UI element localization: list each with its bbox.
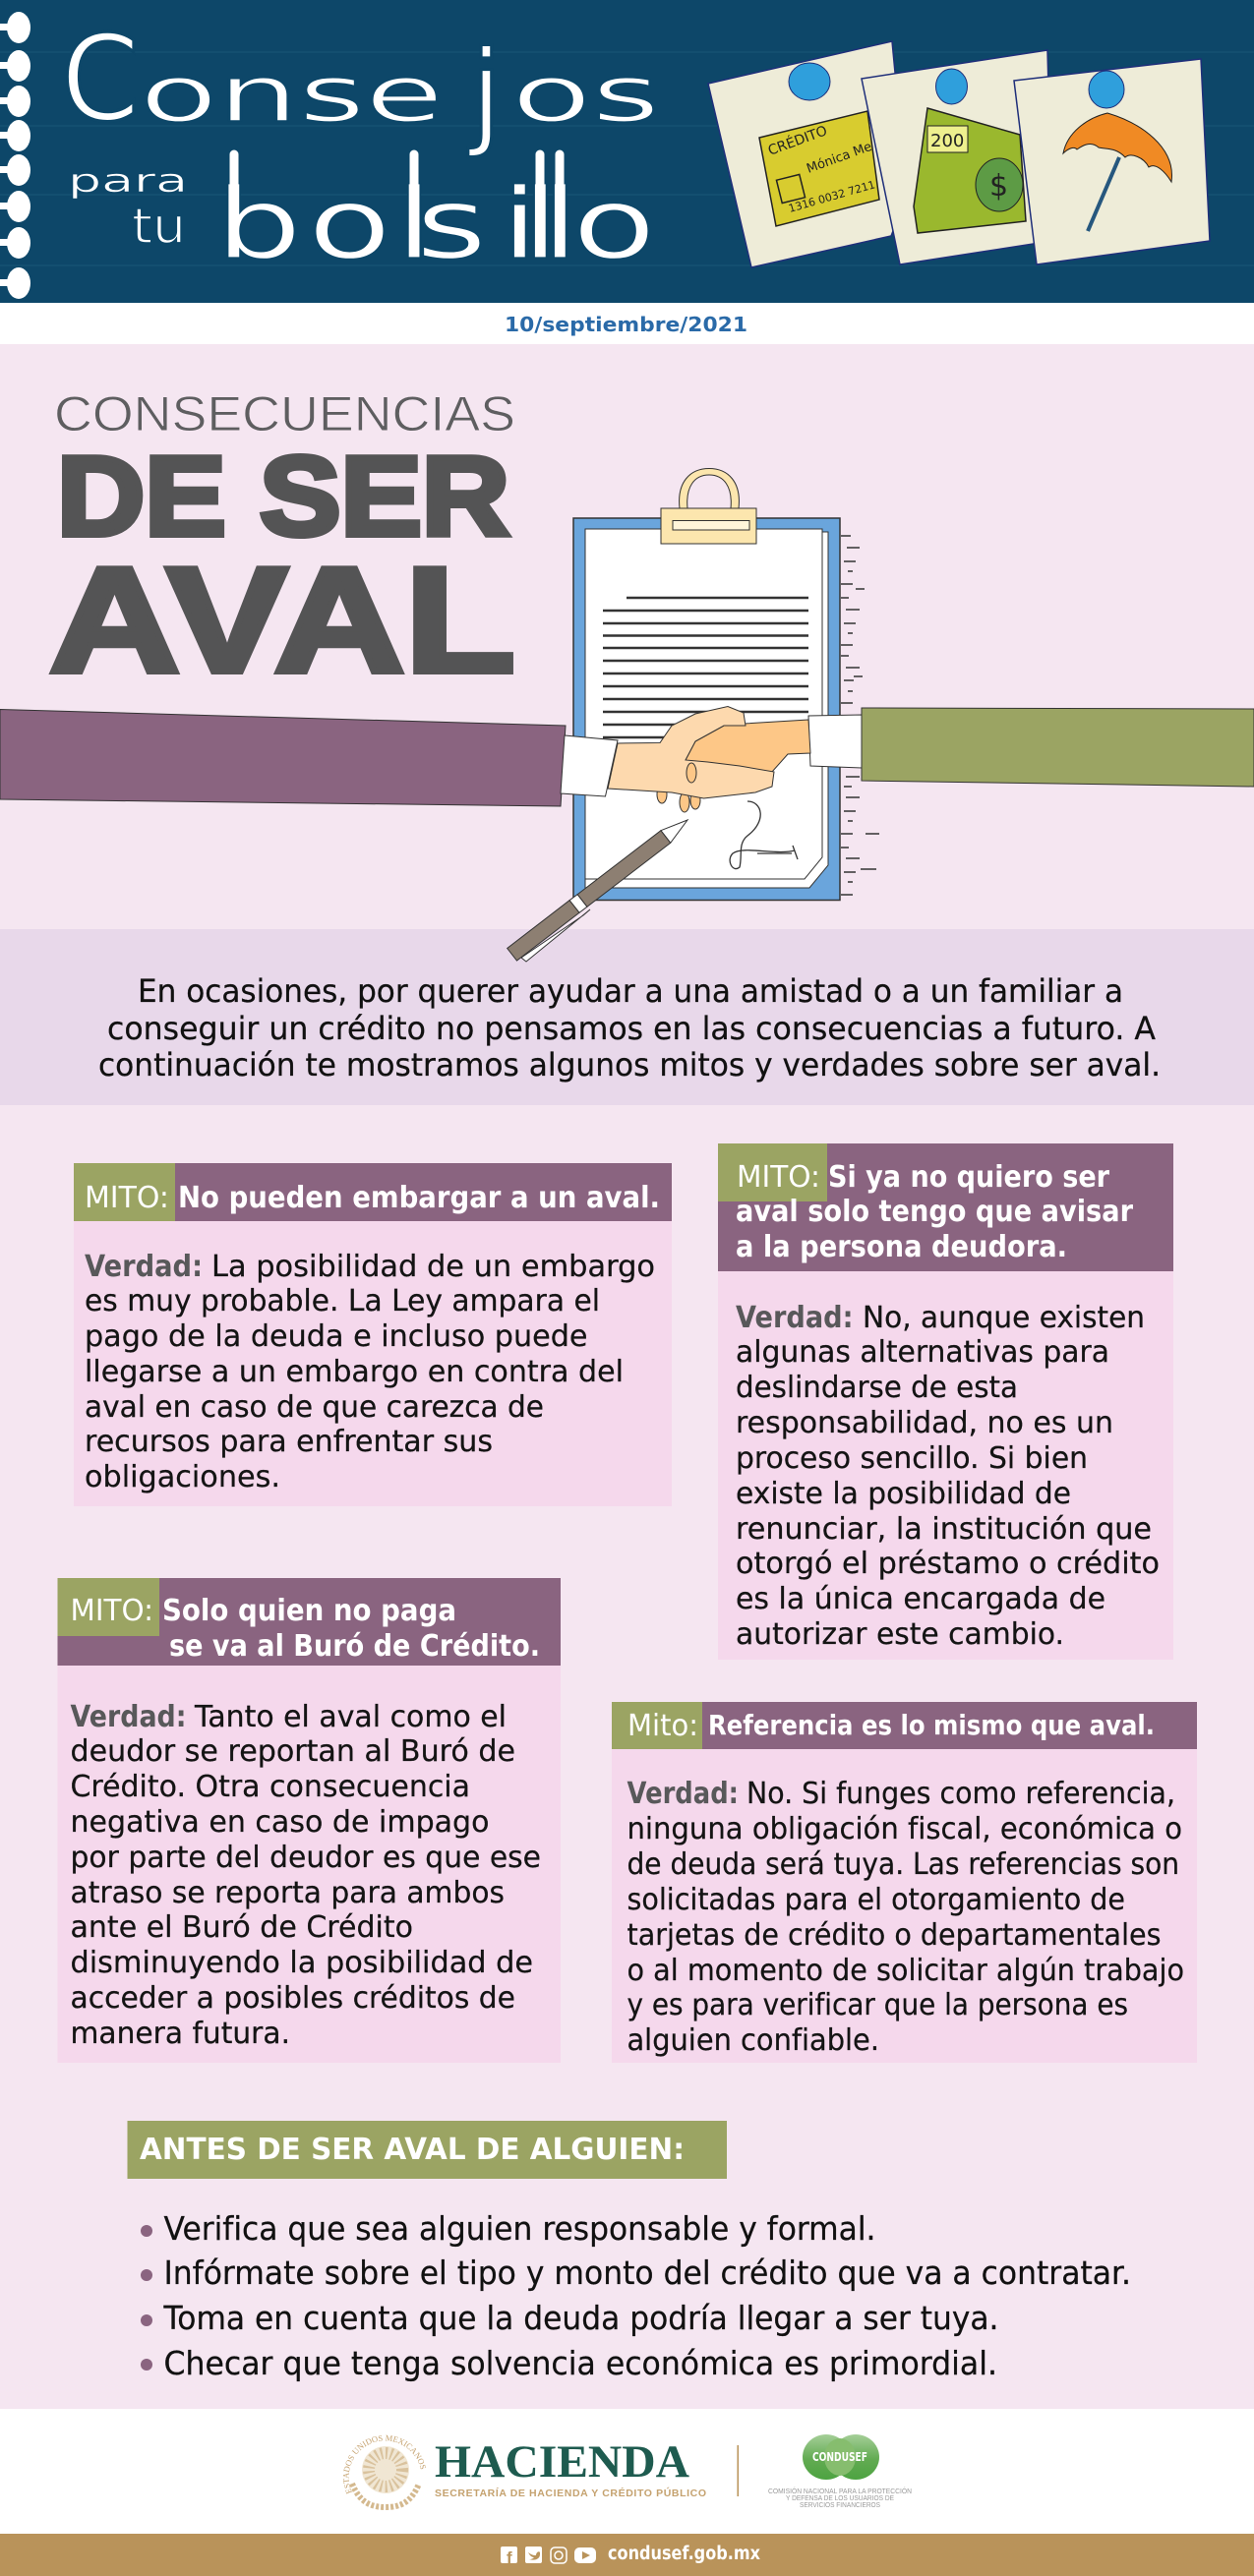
heading: antes de ser aval — [128, 2121, 727, 2179]
truth text: de deuda será tuya. Las referencias son — [627, 1847, 1179, 1882]
myth heading: MITO: — [71, 1594, 153, 1628]
banner title: Consejos para tu bolsillo: bolsillo — [215, 168, 656, 281]
truth text: y es para verificar que la persona es — [627, 1988, 1128, 2022]
truth text: es muy probable. La Ley ampara el — [85, 1284, 600, 1318]
truth text: responsabilidad, no es un — [736, 1406, 1113, 1440]
band: introduction — [0, 929, 1254, 1105]
truth text: Verdad: — [736, 1301, 854, 1335]
icon: facebook: f — [507, 2548, 512, 2567]
truth text: autorizar este cambio. — [736, 1617, 1064, 1652]
truth text: obligaciones. — [85, 1460, 280, 1494]
truth text — [627, 1777, 1184, 2058]
icon: twitter — [525, 2547, 542, 2563]
truth text: Verdad: — [85, 1250, 203, 1284]
note: credit card — [708, 41, 907, 267]
note: umbrella — [1014, 59, 1210, 264]
truth text: aval en caso de que carezca de — [85, 1390, 544, 1425]
truth text — [736, 1301, 1160, 1652]
truth text: solicitadas para el otorgamiento de — [627, 1883, 1125, 1917]
footer bar: condusef.gob.mx — [608, 2544, 760, 2564]
note: banknote: $ — [989, 169, 1008, 204]
truth text: negativa en caso de impago — [71, 1805, 489, 1840]
myth heading: Referencia es lo mismo que aval. — [708, 1709, 1155, 1741]
truth text: tarjetas de crédito o departamentales — [627, 1918, 1161, 1953]
icon: instagram — [551, 2547, 567, 2563]
main title: CONSECUENCIAS — [54, 386, 515, 441]
panel: credit bureau myth — [57, 1578, 561, 2063]
myth heading: a la persona deudora. — [736, 1230, 1067, 1264]
note: credit card: Mónica Me — [805, 140, 874, 177]
intro text: En ocasiones, por querer ayudar a una amistad o a un familiar a — [138, 972, 1123, 1010]
truth text — [85, 1250, 655, 1494]
date strip: 10/septiembre/2021 — [505, 313, 747, 336]
panel: quitting myth — [718, 1143, 1173, 1660]
clipboard — [573, 518, 879, 901]
panel: embargo myth — [74, 1163, 672, 1506]
myth heading: Mito: — [627, 1709, 698, 1743]
myth heading: No pueden embargar a un aval. — [178, 1181, 660, 1215]
truth text: existe la posibilidad de — [736, 1477, 1071, 1511]
truth text: No. Si funges como referencia, — [746, 1777, 1175, 1811]
notebook spiral holes — [0, 12, 30, 299]
truth text: No, aunque existen — [863, 1301, 1145, 1335]
footer logos — [0, 2409, 1254, 2534]
main title: DE SER — [57, 435, 509, 559]
truth text: deslindarse de esta — [736, 1371, 1018, 1405]
myth heading: Solo quien no paga — [162, 1594, 456, 1628]
note: banknote: 200 — [930, 131, 964, 151]
note: banknote — [862, 50, 1052, 264]
panel: reference myth — [612, 1702, 1197, 2063]
checklist: Checar que tenga solvencia económica es primordial. — [163, 2344, 997, 2382]
truth text: llegarse a un embargo en contra del — [85, 1355, 624, 1389]
banner title: Consejos para tu bolsillo — [61, 12, 660, 281]
truth text: ante el Buró de Crédito — [71, 1910, 413, 1945]
icon: youtube — [574, 2547, 596, 2563]
truth text: acceder a posibles créditos de — [71, 1981, 515, 2016]
intro text — [98, 972, 1161, 1083]
truth text: algunas alternativas para — [736, 1335, 1109, 1370]
icon: facebook — [501, 2547, 517, 2567]
truth text: Crédito. Otra consecuencia — [71, 1770, 470, 1804]
myth heading — [71, 1594, 540, 1664]
logo: national seal: ESTADOS UNIDOS MEXICANOS — [342, 2434, 426, 2494]
banner title: Consejos para tu bolsillo: C — [61, 12, 140, 148]
truth text: alguien confiable. — [627, 2023, 879, 2058]
intro text: conseguir un crédito no pensamos en las consecuencias a futuro. A — [107, 1010, 1156, 1047]
truth text: Tanto el aval como el — [194, 1700, 507, 1734]
banner title: Consejos para tu bolsillo: onse — [140, 49, 444, 140]
truth text: recursos para enfrentar sus — [85, 1425, 493, 1459]
truth text: Verdad: — [627, 1777, 739, 1811]
main title — [49, 386, 515, 704]
date strip — [0, 303, 1254, 344]
main title: AVAL — [49, 537, 515, 704]
banner title: Consejos para tu bolsillo: tu — [132, 198, 186, 255]
truth text: atraso se reporta para ambos — [71, 1876, 505, 1910]
truth text: pago de la deuda e incluso puede — [85, 1319, 588, 1354]
myth heading: MITO: — [85, 1181, 169, 1215]
myth heading: se va al Buró de Crédito. — [169, 1629, 540, 1664]
truth text: ninguna obligación fiscal, económica o — [627, 1812, 1182, 1846]
clipboard clip — [661, 468, 756, 544]
truth text: La posibilidad de un embargo — [211, 1250, 655, 1284]
truth text — [71, 1700, 541, 2051]
truth text: o al momento de solicitar algún trabajo — [627, 1954, 1184, 1988]
truth text: por parte del deudor es que ese — [71, 1841, 541, 1875]
truth text: proceso sencillo. Si bien — [736, 1441, 1088, 1476]
logo: condusef: Y DEFENSA DE LOS USUARIOS DE — [786, 2495, 894, 2502]
arm: purple sleeve — [0, 710, 618, 806]
handshake — [608, 706, 810, 812]
banner title: Consejos para tu bolsillo: os — [511, 49, 660, 140]
banner title: Consejos para tu bolsillo: j — [467, 25, 503, 160]
logo: hacienda wordmark: HACIENDA — [435, 2436, 689, 2488]
myth heading: Si ya no quiero ser — [828, 1160, 1109, 1195]
illustration: clipboard and handshake — [0, 468, 1254, 962]
truth text: otorgó el préstamo o crédito — [736, 1547, 1160, 1581]
heading: antes de ser aval: ANTES DE SER AVAL DE ALGUIEN: — [140, 2133, 685, 2167]
logo: hacienda wordmark: SECRETARÍA DE HACIENDA Y CRÉDITO PÚBLICO — [435, 2487, 706, 2499]
intro text: continuación te mostramos algunos mitos y verdades sobre ser aval. — [98, 1046, 1161, 1083]
note: credit card: 1316 0032 7211 — [787, 178, 876, 215]
logo: condusef: SERVICIOS FINANCIEROS — [800, 2502, 880, 2509]
logo: condusef — [768, 2434, 912, 2509]
truth text: disminuyendo la posibilidad de — [71, 1946, 533, 1980]
myth heading: aval solo tengo que avisar — [736, 1195, 1133, 1229]
truth text: renunciar, la institución que — [736, 1512, 1152, 1547]
logo: condusef: CONDUSEF — [812, 2449, 867, 2464]
pen — [508, 820, 687, 962]
truth text: deudor se reportan al Buró de — [71, 1734, 515, 1769]
myth heading — [736, 1160, 1133, 1264]
checklist — [141, 2209, 1131, 2382]
checklist: Verifica que sea alguien responsable y formal. — [163, 2209, 875, 2248]
checklist: Toma en cuenta que la deuda podría llegar a ser tuya. — [163, 2299, 999, 2337]
note: credit card: CRÉDITO — [766, 122, 829, 159]
header banner — [0, 0, 1254, 303]
truth text: Verdad: — [71, 1700, 187, 1734]
truth text: manera futura. — [71, 2017, 290, 2051]
myth heading: MITO: — [737, 1160, 820, 1195]
logo: condusef: COMISIÓN NACIONAL PARA LA PROTECCIÓN — [768, 2487, 912, 2495]
checklist: Infórmate sobre el tipo y monto del crédito que va a contratar. — [163, 2254, 1131, 2292]
footer bar — [0, 2534, 1254, 2576]
truth text: es la única encargada de — [736, 1582, 1105, 1616]
arm: green sleeve — [808, 708, 1254, 787]
banner title: Consejos para tu bolsillo: para — [68, 161, 188, 200]
